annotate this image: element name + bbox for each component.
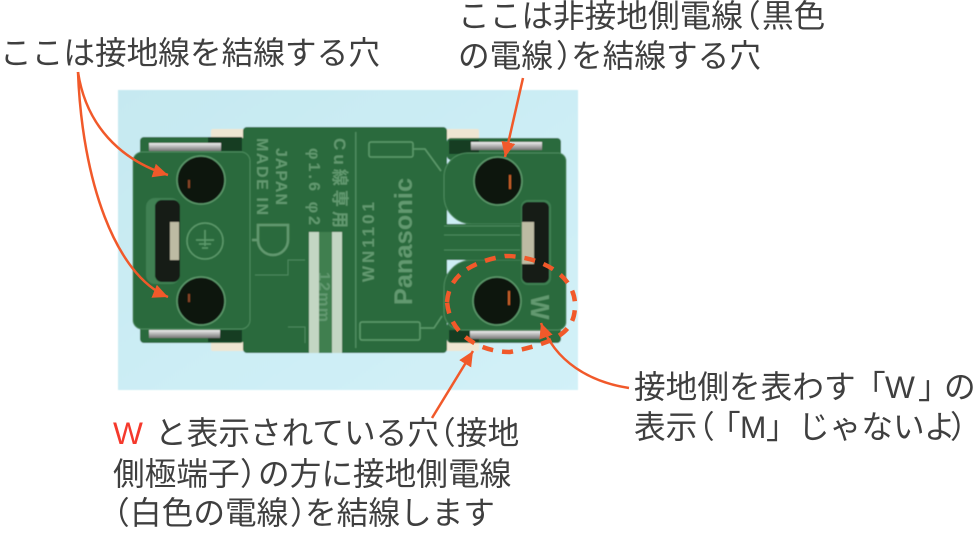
label: W terminal explanation: ） — [240, 456, 272, 492]
label: W mark explanation: 「 — [709, 409, 741, 445]
label: W mark explanation: W — [885, 369, 915, 405]
embossed lettering: Panasonic — [390, 178, 418, 305]
label: W mark explanation: 表示 — [634, 409, 697, 445]
hole: ground bottom — [177, 277, 225, 325]
embossed lettering: 12mm — [315, 272, 332, 322]
label: W mark explanation: じゃないよ — [798, 409, 956, 445]
arrow: ground label to top hole — [78, 72, 168, 175]
label: hot hole — [458, 0, 825, 74]
dashed highlight around W terminal — [447, 256, 575, 352]
embossed lettering: JAPAN — [272, 148, 289, 205]
label: W mark explanation: M — [740, 409, 766, 445]
label: W terminal explanation: 側極端子 — [113, 456, 240, 492]
label: W terminal explanation: （ — [424, 415, 456, 451]
terminal tabs and metal clips — [140, 129, 561, 351]
arrow: hot label to hole — [505, 78, 523, 157]
arrow: W mark label to mark — [541, 323, 629, 388]
hole: neutral — [473, 277, 521, 325]
label: W terminal explanation: W — [113, 415, 143, 451]
label: W terminal explanation: と表示されている穴 — [155, 415, 439, 451]
label: hot hole: を結線する穴 — [571, 38, 761, 74]
label: W terminal explanation: 白色の電線 — [130, 495, 288, 531]
label: W mark explanation: 「 — [854, 369, 886, 405]
embossed lettering: WN1101 — [359, 202, 378, 282]
label: hot hole: ） — [556, 38, 588, 74]
label: W mark explanation: の — [944, 369, 976, 405]
label: W terminal explanation: の方に接地側電線 — [258, 456, 511, 492]
left terminal block — [133, 152, 250, 329]
embossed W mark: W — [525, 295, 555, 320]
label: W mark explanation: 」 — [918, 369, 950, 405]
label: W mark explanation: 接地側を表わす — [634, 369, 856, 405]
photo background — [118, 90, 578, 390]
right terminal block — [444, 153, 566, 330]
embossed lettering: MADE IN — [253, 138, 270, 215]
label: W terminal explanation: ） — [290, 495, 322, 531]
embossed lettering — [253, 138, 418, 322]
embossed lettering: Cu線専用 — [330, 138, 349, 228]
hole: ground top — [177, 156, 225, 204]
label: W terminal explanation — [98, 415, 519, 531]
label: W mark explanation — [634, 369, 976, 445]
embossed lettering: φ1.6 φ2 — [305, 148, 322, 225]
label: ground hole: ここは接地線を結線する穴 — [0, 35, 380, 71]
label: W terminal explanation: 接地 — [456, 415, 519, 451]
label: hot hole: の電線 — [458, 38, 553, 74]
arrow: W hole label to terminal — [432, 351, 473, 418]
switch centre body — [243, 127, 447, 353]
label: W terminal explanation: を結線します — [305, 495, 495, 531]
hole: hot — [474, 157, 522, 205]
label: W mark explanation: （ — [683, 409, 715, 445]
label: W mark explanation: 」 — [766, 409, 798, 445]
panel: photo of switch back — [118, 90, 578, 390]
arrow: ground label to bottom hole — [78, 72, 168, 297]
label: W terminal explanation: （ — [98, 495, 130, 531]
